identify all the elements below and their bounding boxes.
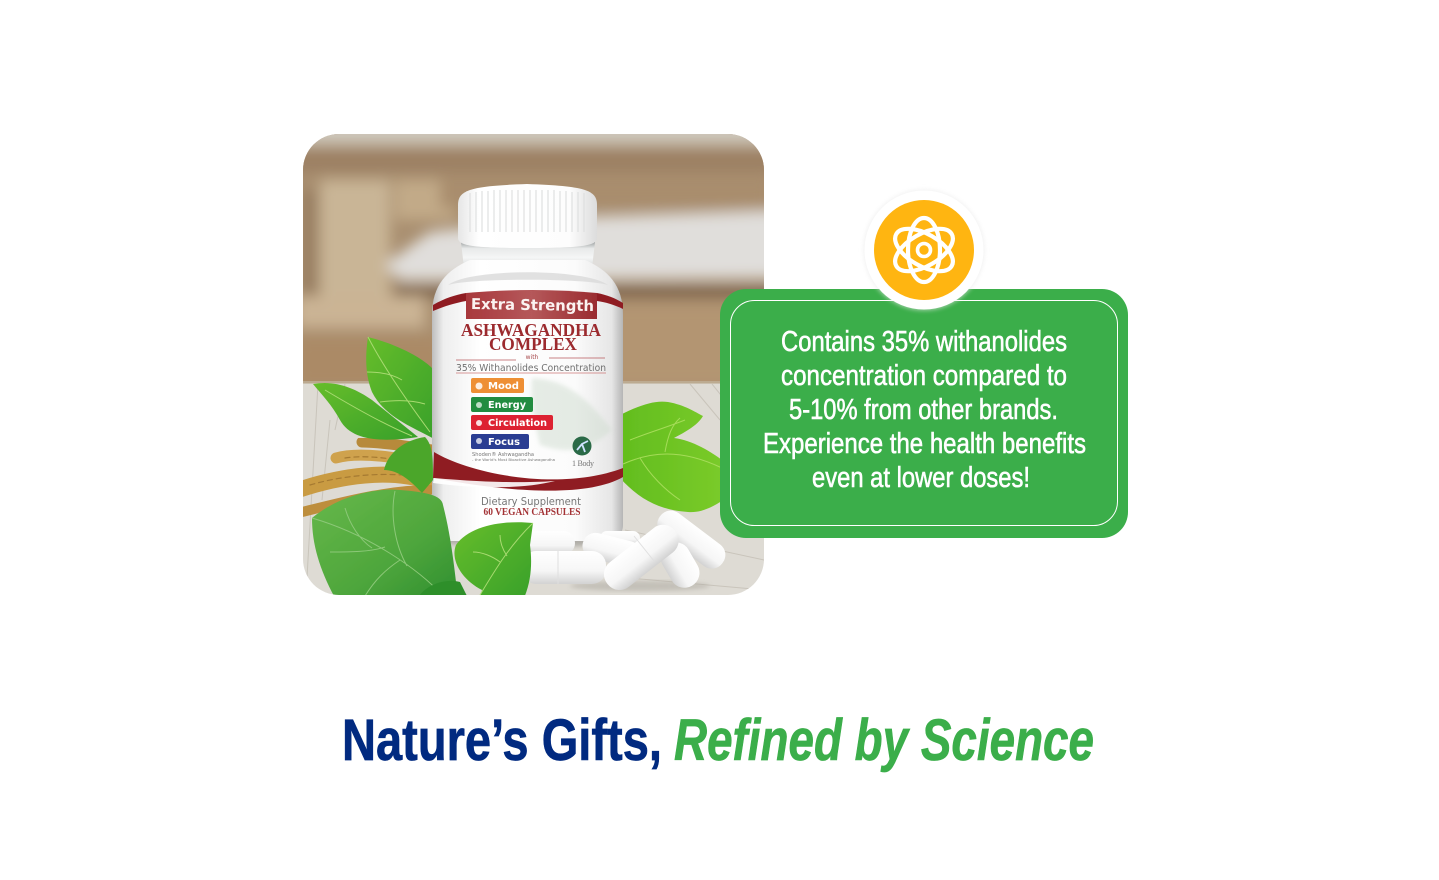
label small print: Shoden® Ashwagandha bbox=[472, 451, 534, 458]
panel inner outline bbox=[730, 300, 1118, 526]
benefit tags bbox=[471, 378, 553, 449]
concentration line: with bbox=[526, 354, 539, 361]
leaves behind bottle, right bbox=[620, 402, 726, 512]
callout text: even at lower doses! bbox=[812, 462, 1030, 494]
callout text bbox=[763, 326, 1086, 494]
label footer bbox=[482, 497, 581, 515]
leaves behind bottle, left bbox=[313, 337, 436, 440]
bottle neck bbox=[461, 242, 595, 264]
callout text: 5-10% from other brands. bbox=[789, 394, 1058, 426]
dark leaf at bottom edge bbox=[420, 581, 466, 595]
shoulder highlight bbox=[448, 272, 608, 285]
label small print bbox=[472, 452, 555, 462]
callout text: Contains 35% withanolides bbox=[781, 326, 1067, 358]
large front leaf bbox=[312, 490, 458, 598]
product name bbox=[461, 324, 601, 350]
title: Refined by Science bbox=[674, 708, 1094, 773]
concentration line: 35% Withanolides Concentration bbox=[456, 363, 606, 374]
label footer: 60 VEGAN CAPSULES bbox=[484, 507, 581, 518]
icon: atom badge bbox=[864, 190, 984, 310]
title bbox=[342, 708, 1094, 773]
bottle body bbox=[432, 260, 623, 541]
small front leaf bbox=[454, 522, 533, 598]
blurred kitchen background bbox=[303, 134, 764, 383]
callout text: Experience the health benefits bbox=[763, 428, 1086, 460]
tag: focus: Focus bbox=[488, 437, 520, 448]
title: Nature’s Gifts, bbox=[342, 708, 662, 773]
brand logo bbox=[572, 436, 594, 468]
roots bbox=[298, 442, 432, 513]
label top band bbox=[433, 293, 623, 311]
extra strength banner: Extra Strength bbox=[471, 295, 594, 315]
tag: circulation: Circulation bbox=[488, 418, 547, 429]
label lower swoosh bbox=[433, 452, 623, 491]
small leaf on bottle edge bbox=[384, 437, 433, 493]
product name: ASHWAGANDHA bbox=[461, 320, 601, 340]
tag: energy: Energy bbox=[488, 400, 526, 411]
label small print: - the World's Most Bioactive Ashwagandha bbox=[472, 458, 555, 462]
panel: product photo bbox=[290, 120, 780, 598]
tag: mood: Mood bbox=[488, 381, 519, 392]
concentration line bbox=[456, 354, 606, 374]
bottle cap bbox=[458, 184, 597, 248]
panel background bbox=[720, 289, 1128, 538]
brand logo: 1 Body bbox=[572, 459, 594, 468]
extra strength banner bbox=[466, 290, 597, 319]
product name: COMPLEX bbox=[489, 334, 577, 354]
label watermark leaf bbox=[532, 378, 612, 450]
capsules bbox=[530, 510, 726, 592]
label footer: Dietary Supplement bbox=[481, 496, 581, 508]
bottle bbox=[432, 184, 623, 541]
callout text: concentration compared to bbox=[781, 360, 1067, 392]
bottle shadow bbox=[450, 541, 584, 548]
callout: green text panel bbox=[720, 289, 1128, 538]
wooden table bbox=[303, 381, 764, 598]
